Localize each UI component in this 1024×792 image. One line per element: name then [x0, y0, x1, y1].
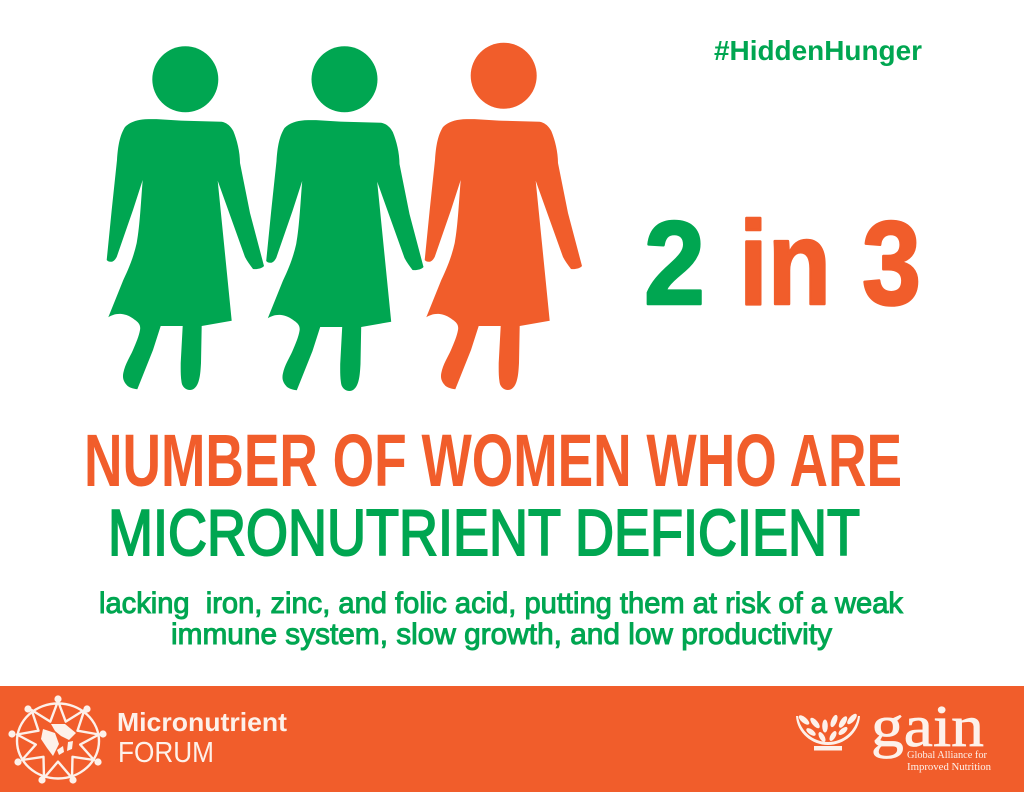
statistic: 2 in 3: 2 — [644, 197, 705, 330]
hashtag: #HiddenHunger — [714, 35, 922, 66]
logo: Micronutrient Forum emblem — [8, 695, 107, 784]
logo text: gain: gain — [871, 693, 984, 759]
logo text: gain: Improved Nutrition — [907, 762, 992, 773]
statistic: 2 in 3: in — [739, 197, 831, 330]
logo text: gain: Global Alliance for — [907, 750, 987, 761]
body text: lacking iron, zinc, and folic acid, putting them at risk of a weak — [99, 587, 904, 620]
icon: green woman 2 — [266, 46, 424, 391]
logo text: gain — [871, 693, 992, 773]
statistic: 2 in 3 — [644, 197, 921, 330]
icon: orange woman — [425, 43, 582, 390]
heading: micronutrient deficient: MICRONUTRIENT DEFICIENT — [108, 496, 860, 569]
logo text: Micronutrient Forum — [117, 707, 287, 769]
footer band — [0, 686, 1024, 792]
icon: green woman 1 — [107, 46, 264, 390]
body text: immune system, slow growth, and low productivity — [171, 618, 832, 651]
logo text: Micronutrient Forum: FORUM — [118, 737, 214, 769]
logo text: Micronutrient Forum: Micronutrient — [117, 707, 287, 737]
body text — [99, 587, 904, 651]
statistic: 2 in 3: 3 — [862, 197, 921, 330]
logo: GAIN bowl and grain — [796, 712, 860, 750]
